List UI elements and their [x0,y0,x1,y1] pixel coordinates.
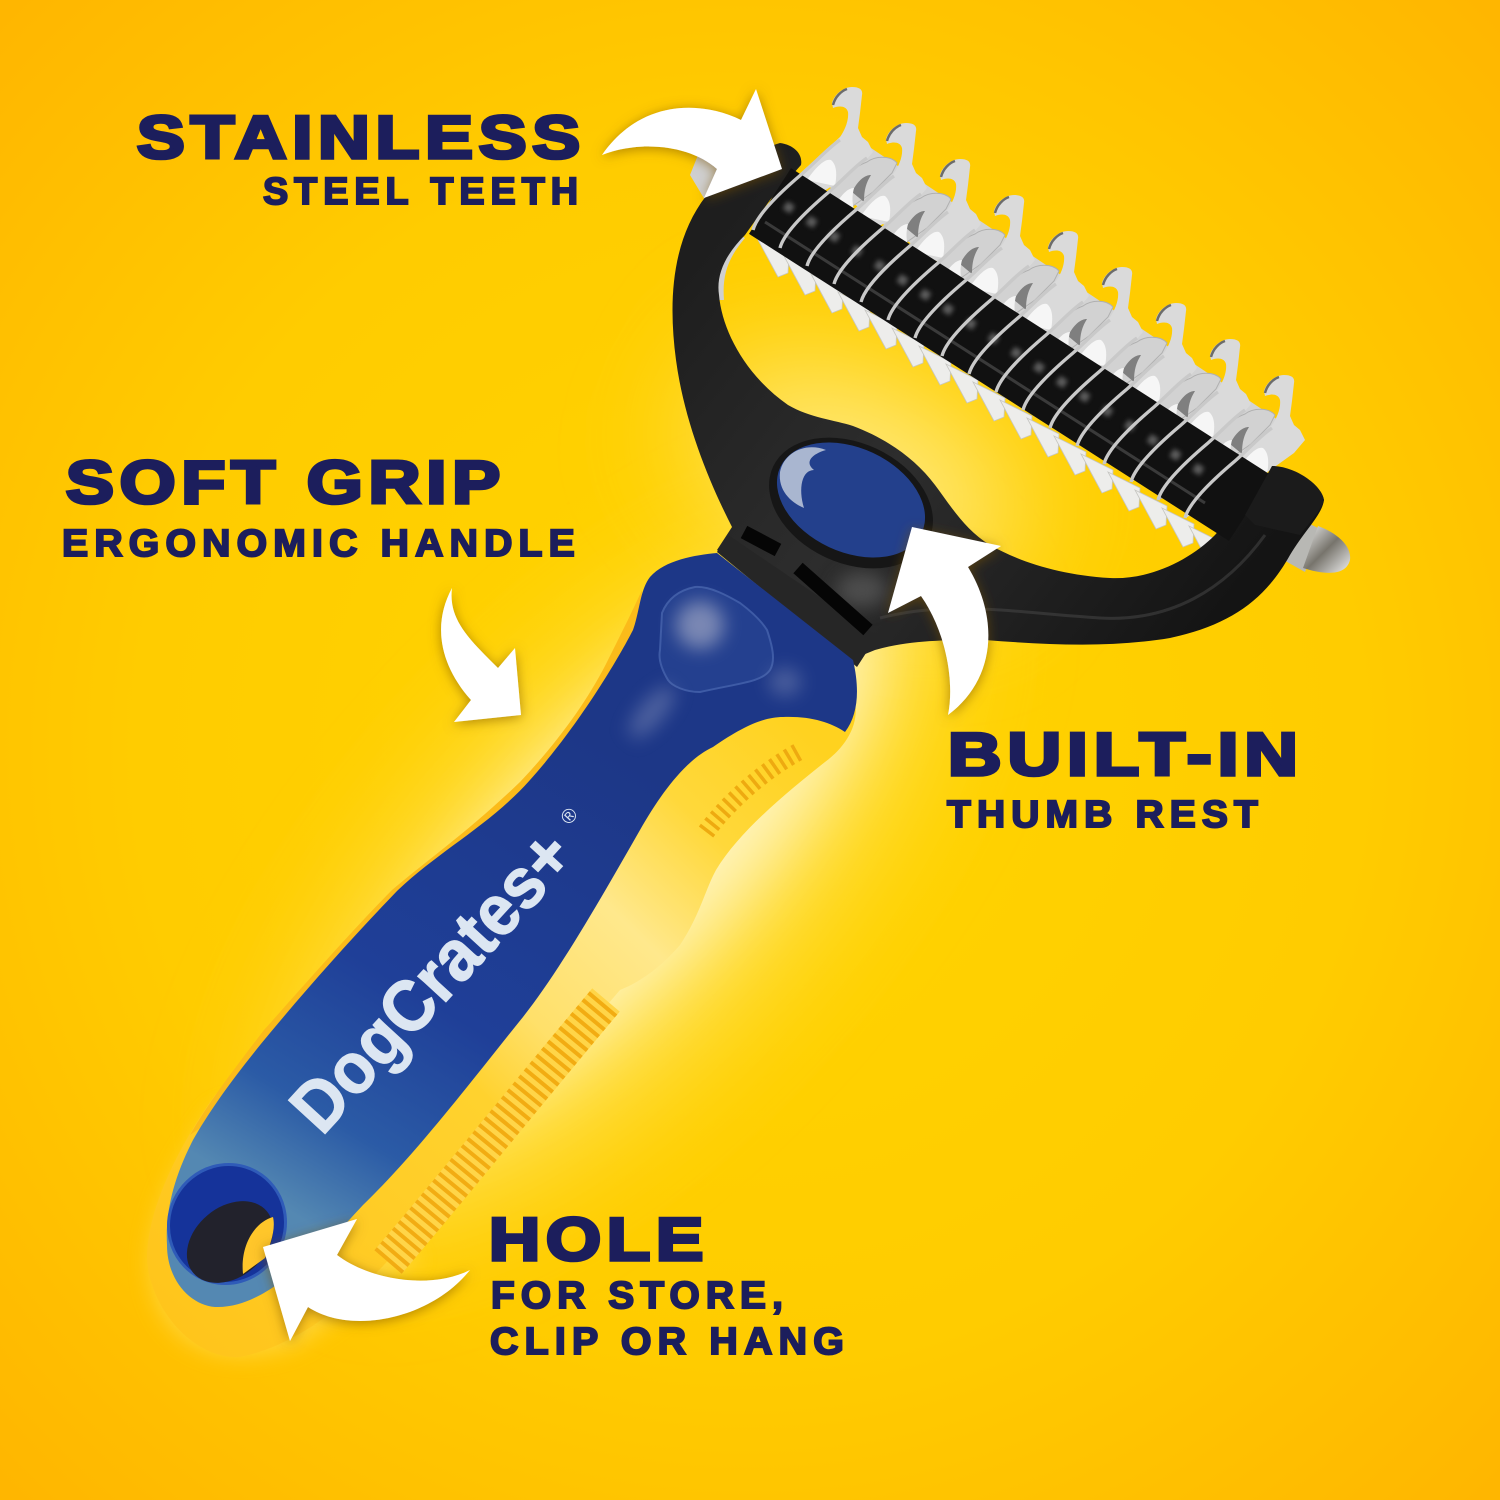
black axle bar [765,201,1250,508]
thumb rest [748,412,954,594]
brand logo: ® [556,803,583,829]
arrow: to soft grip [441,588,521,722]
subheading: ergonomic handle: ERGONOMIC HANDLE [62,523,581,565]
subheading: steel teeth: STEEL TEETH [263,171,584,213]
collar slot right [798,568,868,630]
lower teeth [757,238,1221,565]
blue handle [167,553,857,1307]
steel teeth backing band [805,146,1302,475]
grip ridges upper [706,752,798,832]
heading: hole: HOLE [489,1206,709,1273]
brand logo: DogCrates+ [275,815,589,1148]
nut and dome on axle [1280,518,1350,573]
hooked steel teeth [753,87,1305,518]
heading: stainless: STAINLESS [137,104,586,171]
yellow under-handle [147,695,856,1357]
frame gray sheen near collar [836,572,888,608]
heading: built-in: BUILT-IN [948,721,1304,788]
gray frame plate [690,150,745,300]
arrow: to hole [263,1219,470,1341]
tooth rings across bar [753,140,1272,518]
handle thumb pad [622,587,801,744]
arrow: to steel teeth [602,89,782,198]
arc steel teeth [780,157,1275,500]
heading: soft grip: SOFT GRIP [66,449,506,516]
collar [717,535,877,667]
subheading: thumb rest: THUMB REST [947,794,1264,836]
yellow top edge of grip [190,590,642,1135]
arrow: to thumb rest [888,527,1001,715]
subheading: clip or hang: CLIP OR HANG [490,1321,850,1363]
black frame [672,143,1324,659]
grip ridges lower [388,1000,606,1262]
hanging hole [147,1143,307,1305]
bar end cap [1245,466,1324,535]
collar slot left [744,532,778,550]
product: deshedding tool [147,87,1350,1357]
grip ridges base [388,1000,606,1262]
frame inner highlight [880,535,1265,618]
subheading: for store: FOR STORE, [491,1275,789,1317]
background glow behind handle [192,317,1052,1310]
